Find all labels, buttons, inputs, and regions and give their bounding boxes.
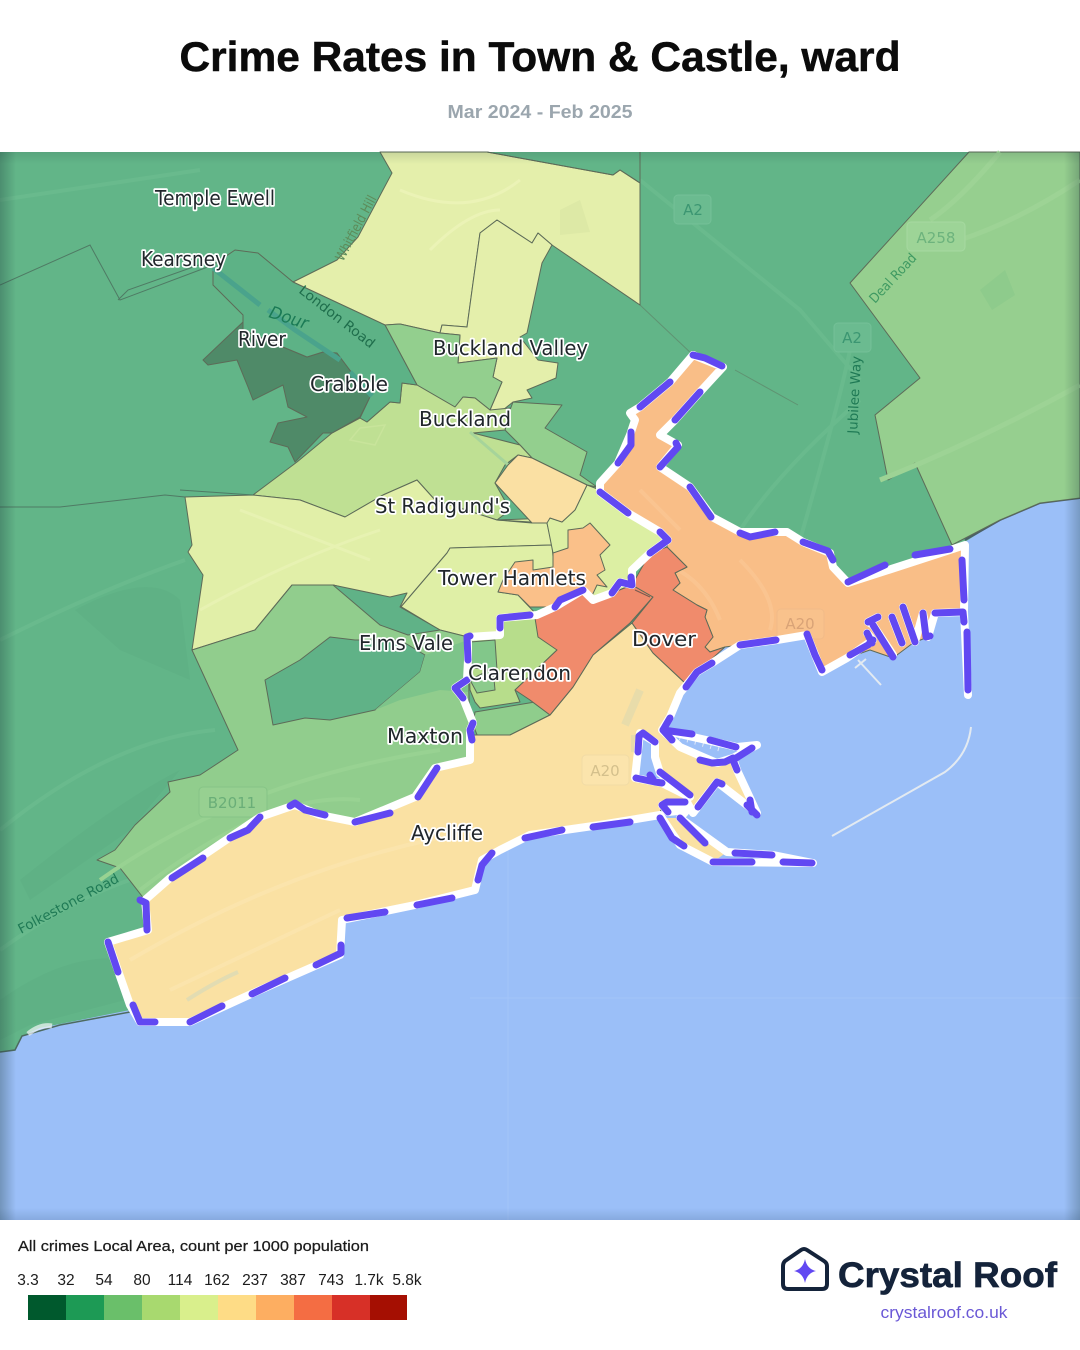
road and river names: Whitfield Hill: [332, 193, 380, 264]
place labels: Clarendon: [468, 661, 571, 685]
central red wards: [515, 585, 653, 715]
place labels: Crabble: [310, 372, 388, 396]
road and river names: Deal Road: [866, 250, 920, 307]
harbour breakwater: [832, 727, 971, 836]
road and river names: Jubilee Way: [845, 355, 865, 435]
Buckland ward: [253, 383, 532, 520]
map edge shading: [0, 152, 1080, 1220]
road and river names: Folkestone Road: [15, 871, 122, 938]
light green east area: [850, 152, 1080, 545]
Buckland Valley green ward: [385, 324, 502, 410]
Maxton light green ward: [97, 585, 470, 900]
road shields: B2011: [208, 794, 256, 812]
Tower Hamlets ward: [400, 545, 555, 637]
road and river names: [15, 193, 920, 938]
thin ward boundaries: [0, 245, 253, 507]
legend value labels: 387: [280, 1272, 306, 1289]
sea: [0, 152, 1080, 1220]
road shields: A2: [842, 329, 862, 347]
road shields: A2: [683, 201, 703, 219]
map panel: [0, 152, 1080, 1220]
legend value labels: 54: [95, 1272, 113, 1289]
orange ward central: [498, 523, 610, 607]
Town and Castle orange ward: [600, 355, 965, 672]
title: Crime Rates in Town & Castle, ward: [180, 33, 900, 80]
St Radigund's west pale ward: [185, 480, 552, 650]
place labels: Buckland Valley: [433, 336, 588, 360]
river Dour: [213, 268, 372, 396]
road and river names: Dour: [266, 303, 312, 334]
icon: house with star: [783, 1249, 827, 1289]
legend title: All crimes Local Area, count per 1000 population: [18, 1238, 369, 1255]
place labels: Dover: [632, 627, 697, 651]
legend value labels: 114: [168, 1272, 193, 1289]
place labels: Temple Ewell: [154, 186, 275, 210]
road shields: [199, 195, 965, 817]
place labels: Buckland: [419, 407, 511, 431]
place labels: Maxton: [387, 724, 463, 748]
place labels: Kearsney: [141, 247, 226, 271]
crabble dark ward: [203, 322, 370, 462]
legend value labels: 32: [57, 1272, 75, 1289]
legend value labels: 80: [133, 1272, 151, 1289]
west area tone patches: [0, 587, 190, 1040]
legend value labels: 162: [204, 1272, 230, 1289]
website link text: crystalroof.co.uk: [880, 1304, 1008, 1322]
land base: [0, 152, 1080, 1052]
forest ward patches: [333, 585, 440, 635]
north pale ward: [293, 152, 640, 333]
place labels: Tower Hamlets: [437, 566, 586, 590]
Buckland Valley pale ward: [440, 220, 558, 410]
legend value labels: 5.8k: [392, 1272, 422, 1289]
ward boundary: white outline: [108, 355, 968, 1022]
road shields: A20: [590, 762, 620, 780]
road shields: A258: [917, 229, 955, 247]
river valley ward: [213, 250, 417, 422]
St Radigund's peach ward: [495, 455, 587, 523]
east Buckland green ward: [505, 402, 597, 487]
legend value labels: 1.7k: [354, 1272, 384, 1289]
place labels: Elms Vale: [359, 631, 453, 655]
place labels: Aycliffe: [411, 821, 483, 845]
logo wordmark: Crystal Roof: [838, 1256, 1057, 1295]
road shields: A20: [785, 615, 815, 633]
Aycliffe ward: [108, 623, 757, 1022]
ward boundary: purple dashes: [108, 355, 968, 1022]
subtitle: date range: Mar 2024 - Feb 2025: [448, 101, 632, 122]
harbour water notches: [635, 733, 662, 783]
road and river names: London Road: [296, 283, 378, 352]
legend: [17, 1238, 422, 1320]
legend value labels: [17, 1272, 422, 1289]
Clarendon wards: [468, 618, 557, 708]
logo: Crystal Roof: [783, 1249, 1057, 1322]
legend colour bar: [28, 1295, 407, 1320]
east central pale ward: [497, 485, 668, 600]
legend value labels: 743: [318, 1272, 344, 1289]
place labels: River: [238, 327, 287, 351]
legend value labels: 237: [242, 1272, 268, 1289]
legend value labels: 3.3: [17, 1272, 39, 1289]
place labels: [141, 186, 697, 845]
place labels: St Radigund's: [375, 494, 510, 518]
